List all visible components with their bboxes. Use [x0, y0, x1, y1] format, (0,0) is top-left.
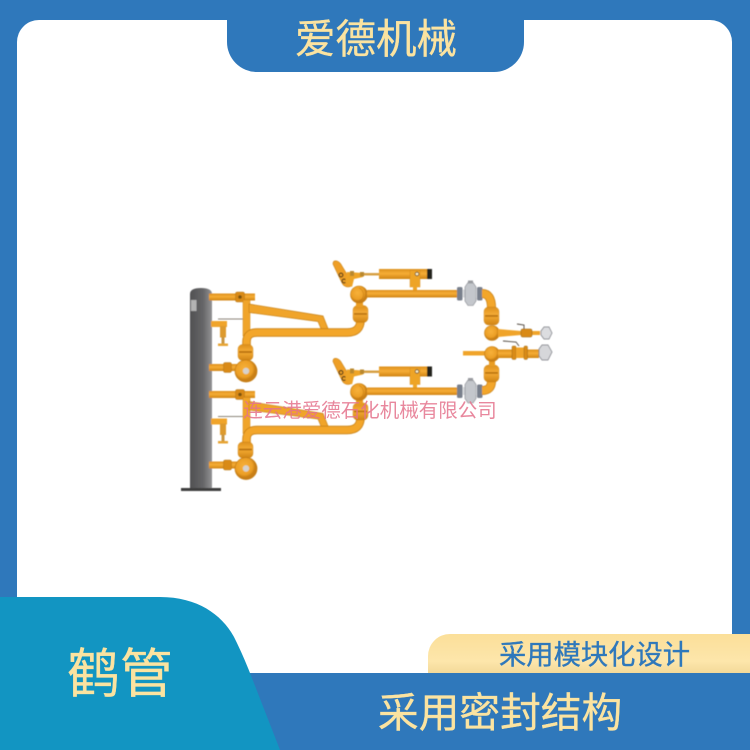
- text: sealed structure: 采用密封结构: [378, 690, 622, 736]
- lower outlet pipe and coupler: [463, 341, 552, 390]
- watermark: company name: 连云港爱德石化机械有限公司: [243, 400, 497, 422]
- column: vertical support post: [181, 288, 221, 491]
- lower loading arm: [209, 358, 482, 480]
- yellow tab: modular design: [428, 634, 750, 673]
- header tab with company name: [227, 0, 524, 72]
- bottom banner: sealed structure: [240, 673, 750, 750]
- teal title block: [0, 597, 280, 750]
- upper outlet pipe and coupler: [482, 294, 552, 340]
- text: modular design: 采用模块化设计: [499, 639, 690, 670]
- upper loading arm: [209, 261, 482, 382]
- title: product name: 鹤管: [67, 645, 173, 704]
- heading: company name: 爱德机械: [295, 16, 457, 62]
